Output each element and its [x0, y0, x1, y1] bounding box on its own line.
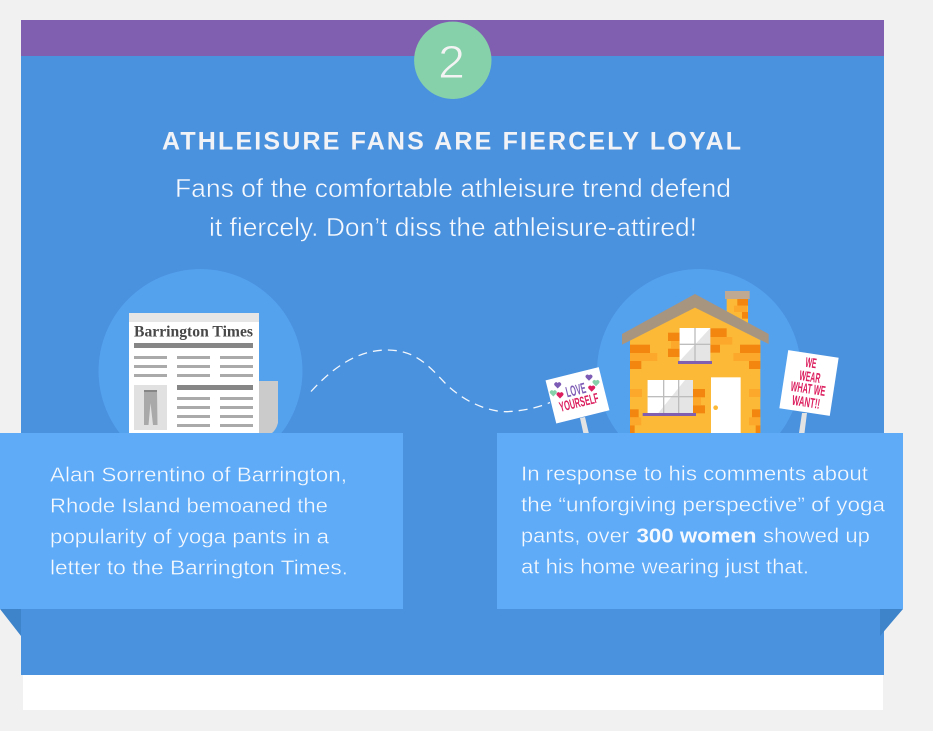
panel: left callout: popularity of yoga pants in a	[50, 526, 330, 548]
icon: newspaper: Barrington Times	[134, 324, 253, 340]
panel: right callout: the “unforgiving perspective” of yoga	[521, 494, 886, 516]
panel: right callout: showed up	[763, 524, 870, 548]
icon: we wear what we want sign: WE	[804, 354, 818, 371]
icon: we wear what we want sign: WHAT WE	[790, 378, 827, 399]
purple top band	[21, 20, 884, 56]
icon: love yourself sign: YOURSELF	[557, 389, 600, 415]
panel: left callout: letter to the Barrington Times.	[50, 556, 348, 580]
intro text: Fans of the comfortable athleisure trend defend	[175, 173, 731, 203]
icon: love yourself sign: LOVE	[564, 380, 588, 401]
panel: left callout: Alan Sorrentino of Barrington,	[50, 464, 347, 486]
white card base	[23, 660, 883, 710]
icon: left circle backdrop	[98, 269, 302, 473]
heading: ATHLEISURE FANS ARE FIERCELY LOYAL	[162, 128, 741, 156]
panel: right callout: at his home wearing just that.	[521, 556, 809, 578]
panel: blue background	[21, 56, 884, 675]
panel: right callout	[497, 433, 903, 609]
number badge: 2	[438, 36, 465, 88]
icon: newspaper	[129, 313, 278, 433]
icon: we wear what we want sign: WANT!!	[791, 392, 821, 412]
icon: right circle backdrop	[597, 269, 801, 473]
arrow: dashed path	[311, 350, 550, 412]
panel: right callout: In response to his comments about	[521, 462, 868, 486]
intro text: it fiercely. Don’t diss the athleisure-attired!	[209, 212, 697, 242]
panel: right callout: pants, over	[521, 524, 629, 548]
panel: left callout	[0, 433, 403, 609]
panel: left callout: Rhode Island bemoaned the	[50, 494, 328, 518]
icon: we wear what we want sign	[779, 350, 839, 433]
number badge	[414, 22, 491, 99]
panel: right callout: 300 women	[636, 524, 756, 548]
icon: we wear what we want sign: WEAR	[798, 367, 822, 386]
intro text	[175, 173, 731, 242]
right ribbon fold	[880, 609, 903, 636]
icon: love yourself sign	[546, 367, 609, 434]
left ribbon fold	[0, 609, 21, 636]
icon: house	[622, 291, 769, 433]
